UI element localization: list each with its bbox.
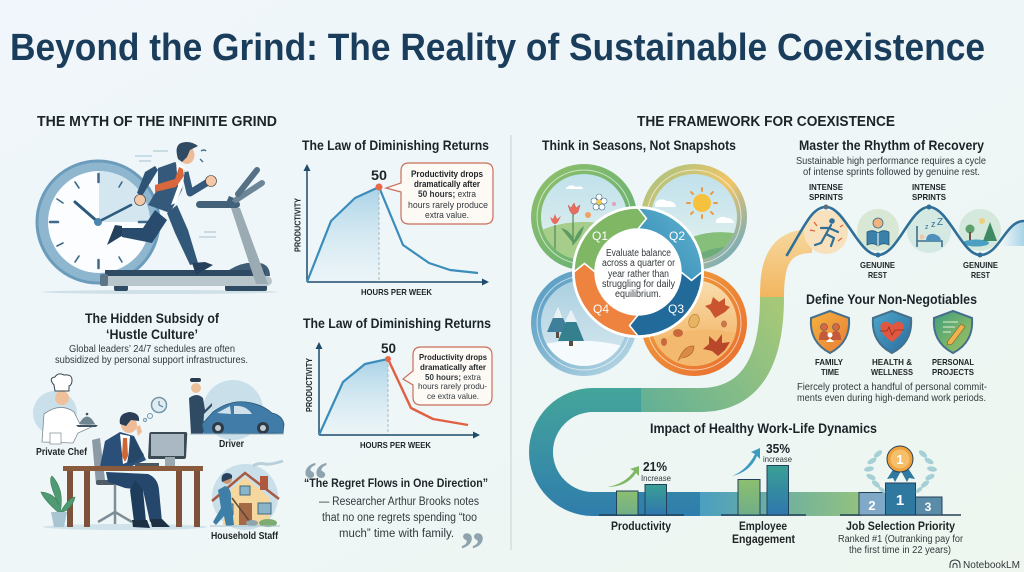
labels: sprint and rest: SPRINTS — [912, 192, 946, 202]
text: evaluate balance: Evaluate balance — [606, 248, 671, 259]
icon: sleep circle: Z — [937, 217, 943, 228]
callout: 50 hours; extra — [425, 372, 481, 382]
text: evaluate balance — [602, 248, 676, 300]
icon: reading rest circle — [857, 209, 899, 251]
season: autumn — [641, 270, 747, 376]
arrow: rhythm wave — [787, 204, 1024, 258]
heading: hidden subsidy: The Hidden Subsidy of — [85, 310, 219, 326]
treadmill — [100, 170, 272, 291]
season: spring — [531, 164, 636, 269]
text: hidden subsidy description — [55, 344, 248, 366]
panel: master the rhythm of recovery — [787, 137, 1024, 280]
label: employee engagement — [732, 521, 795, 546]
season: summer — [641, 164, 747, 270]
callout: 50 hours; extra — [418, 189, 476, 199]
icon: medal: 1 — [896, 452, 904, 467]
labels: sprint and rest: INTENSE — [809, 182, 843, 192]
arrow: productivity growth — [607, 466, 639, 487]
callout: regret quote: that no one regrets spending “too — [322, 512, 477, 524]
text: rhythm description: of intense sprints followed by genuine rest. — [803, 167, 980, 178]
labels: sprint and rest — [809, 182, 998, 280]
panel: think in seasons — [524, 137, 747, 376]
label: quarter names: Q2 — [669, 229, 685, 243]
text: ranked number one: the first time in 22 years) — [849, 545, 951, 556]
label: quarter names — [592, 229, 685, 316]
text: ranked number one: Ranked #1 (Outranking pay for — [838, 534, 964, 545]
callout: regret quote: — Researcher Arthur Brooks notes — [319, 496, 479, 508]
chart: job selection podium: 1 — [896, 492, 904, 509]
labels: non-negotiables: HEALTH & — [872, 357, 912, 367]
arrow: serpentine ribbon — [541, 221, 1024, 504]
heading: seasons: Think in Seasons, Not Snapshots — [542, 137, 736, 153]
chart: job selection podium — [838, 446, 964, 556]
heading: impact: Impact of Healthy Work-Life Dynamics — [650, 420, 877, 436]
axes — [319, 346, 476, 435]
text: ranked number one — [838, 534, 964, 556]
curve: rise — [319, 359, 388, 435]
chart: law of diminishing returns, first version — [292, 137, 493, 297]
chart: productivity: 21% — [643, 459, 667, 474]
icon: sleep circle — [907, 209, 951, 253]
icon: private chef — [33, 374, 98, 458]
labels: non-negotiables: PERSONAL — [932, 357, 974, 367]
diagram: quarter cycle ring — [572, 206, 704, 338]
callout — [403, 347, 492, 405]
labels: sprint and rest: GENUINE — [963, 260, 998, 270]
callout: ce extra value. — [427, 391, 479, 401]
callout — [386, 163, 493, 224]
chart: law of diminishing returns, first version: 50 — [371, 167, 387, 183]
curve: decline — [388, 359, 468, 425]
text: evaluate balance: year rather than — [608, 269, 669, 280]
label: quarter names: Q4 — [593, 302, 609, 316]
text: evaluate balance: across a quarter or — [602, 258, 676, 269]
callout: hours rarely produce — [408, 200, 488, 210]
chart: employee engagement: 35% — [766, 441, 790, 456]
chart: employee engagement: increase — [763, 454, 792, 464]
icon: personal projects shield — [934, 311, 972, 353]
label: quarter names: Q1 — [592, 229, 608, 243]
text: non-negotiables description: Fiercely protect a handful of personal commit- — [797, 381, 987, 393]
callout: Productivity drops — [419, 352, 487, 362]
heading: myth: THE MYTH OF THE INFINITE GRIND — [37, 114, 277, 130]
callout: extra value. — [425, 210, 469, 220]
callout: Productivity drops — [411, 169, 483, 179]
heading: chart one: The Law of Diminishing Returns — [302, 137, 489, 153]
callout: regret quote: much” time with family. — [339, 528, 454, 540]
callout: regret quote: “ — [303, 451, 328, 507]
heading: non-negotiables: Define Your Non-Negotiables — [806, 291, 977, 307]
heading: chart two: The Law of Diminishing Returns — [303, 315, 491, 331]
chart: law of diminishing returns, second version: 50 — [381, 340, 396, 356]
icon: driver and car — [189, 378, 284, 450]
runner — [107, 142, 216, 275]
axes — [307, 168, 485, 282]
heading: framework: THE FRAMEWORK FOR COEXISTENCE — [637, 114, 895, 130]
label: private chef: Private Chef — [36, 447, 88, 458]
axis label: hours per week: HOURS PER WEEK — [361, 287, 433, 297]
label: household staff: Household Staff — [211, 531, 279, 542]
panel: impact of healthy work-life dynamics — [599, 420, 964, 556]
text: evaluate balance: struggling for daily — [602, 279, 675, 290]
text: rhythm description — [796, 156, 986, 178]
labels: non-negotiables — [815, 357, 974, 377]
label: employee engagement: Engagement — [732, 534, 795, 546]
icon: sleep circle: z — [931, 219, 936, 229]
axis label: productivity: PRODUCTIVITY — [292, 198, 302, 252]
text: non-negotiables description — [797, 381, 987, 404]
icon: laurels — [864, 449, 937, 494]
icon: sprint circle — [804, 210, 848, 254]
icon: plant — [41, 476, 75, 527]
chart: productivity: Increase — [641, 473, 671, 483]
label: productivity: Productivity — [611, 521, 672, 533]
heading: rhythm: Master the Rhythm of Recovery — [799, 137, 984, 153]
text: evaluate balance: equilibrium. — [615, 289, 661, 300]
icon: overworked executive at desk — [41, 398, 207, 530]
axis label: productivity: PRODUCTIVITY — [304, 358, 314, 412]
chart: law of diminishing returns, second version — [303, 315, 492, 450]
chart: productivity — [599, 459, 684, 533]
chart: job selection podium: 3 — [925, 500, 932, 514]
callout: dramatically after — [420, 362, 487, 372]
labels: sprint and rest: GENUINE — [860, 260, 895, 270]
icon: family shield — [811, 311, 849, 353]
icon: nature rest circle — [959, 209, 1001, 251]
panel: define your non-negotiables — [797, 291, 987, 404]
callout: regret quote: “The Regret Flows in One Direction” — [304, 478, 488, 490]
season: winter — [531, 270, 637, 376]
brand mark: NotebookLM: NotebookLM — [963, 559, 1020, 571]
label: employee engagement: Employee — [739, 521, 787, 533]
heading: hidden subsidy — [85, 310, 219, 342]
arrow: engagement growth — [732, 448, 760, 476]
illustration: runner on treadmill with clock — [37, 142, 278, 294]
icon: health shield — [873, 311, 911, 353]
panel: the myth of the infinite grind — [37, 114, 278, 294]
label: job selection priority: Job Selection Priority — [846, 521, 956, 533]
icon: sleep circle: z — [925, 224, 929, 231]
text: hidden subsidy description: subsidized by personal support infrastructures. — [55, 355, 248, 366]
labels: sprint and rest: INTENSE — [912, 182, 946, 192]
axis label: hours per week: HOURS PER WEEK — [360, 440, 432, 450]
callout: dramatically after — [414, 179, 480, 189]
heading: hidden subsidy: ‘Hustle Culture’ — [106, 326, 198, 342]
text: rhythm description: Sustainable high performance requires a cycle — [796, 156, 986, 167]
callout: regret quote — [303, 451, 488, 572]
labels: sprint and rest: REST — [971, 270, 991, 280]
labels: non-negotiables: PROJECTS — [932, 367, 974, 377]
text: non-negotiables description: ments even during high-demand work periods. — [797, 392, 986, 404]
labels: non-negotiables: WELLNESS — [871, 367, 913, 377]
callout: hours rarely produ- — [418, 381, 487, 391]
labels: sprint and rest: REST — [868, 270, 888, 280]
icon: household staff and house — [210, 461, 283, 542]
chart: job selection podium: 2 — [868, 498, 876, 513]
chart: employee engagement — [721, 441, 806, 546]
label: driver: Driver — [219, 439, 244, 450]
labels: sprint and rest: SPRINTS — [809, 192, 843, 202]
curve — [307, 187, 478, 282]
panel: hidden subsidy — [33, 310, 284, 542]
text: hidden subsidy description: Global leaders’ 24/7 schedules are often — [69, 344, 235, 355]
label: quarter names: Q3 — [668, 302, 684, 316]
labels: non-negotiables: TIME — [821, 367, 839, 377]
labels: non-negotiables: FAMILY — [815, 357, 843, 367]
